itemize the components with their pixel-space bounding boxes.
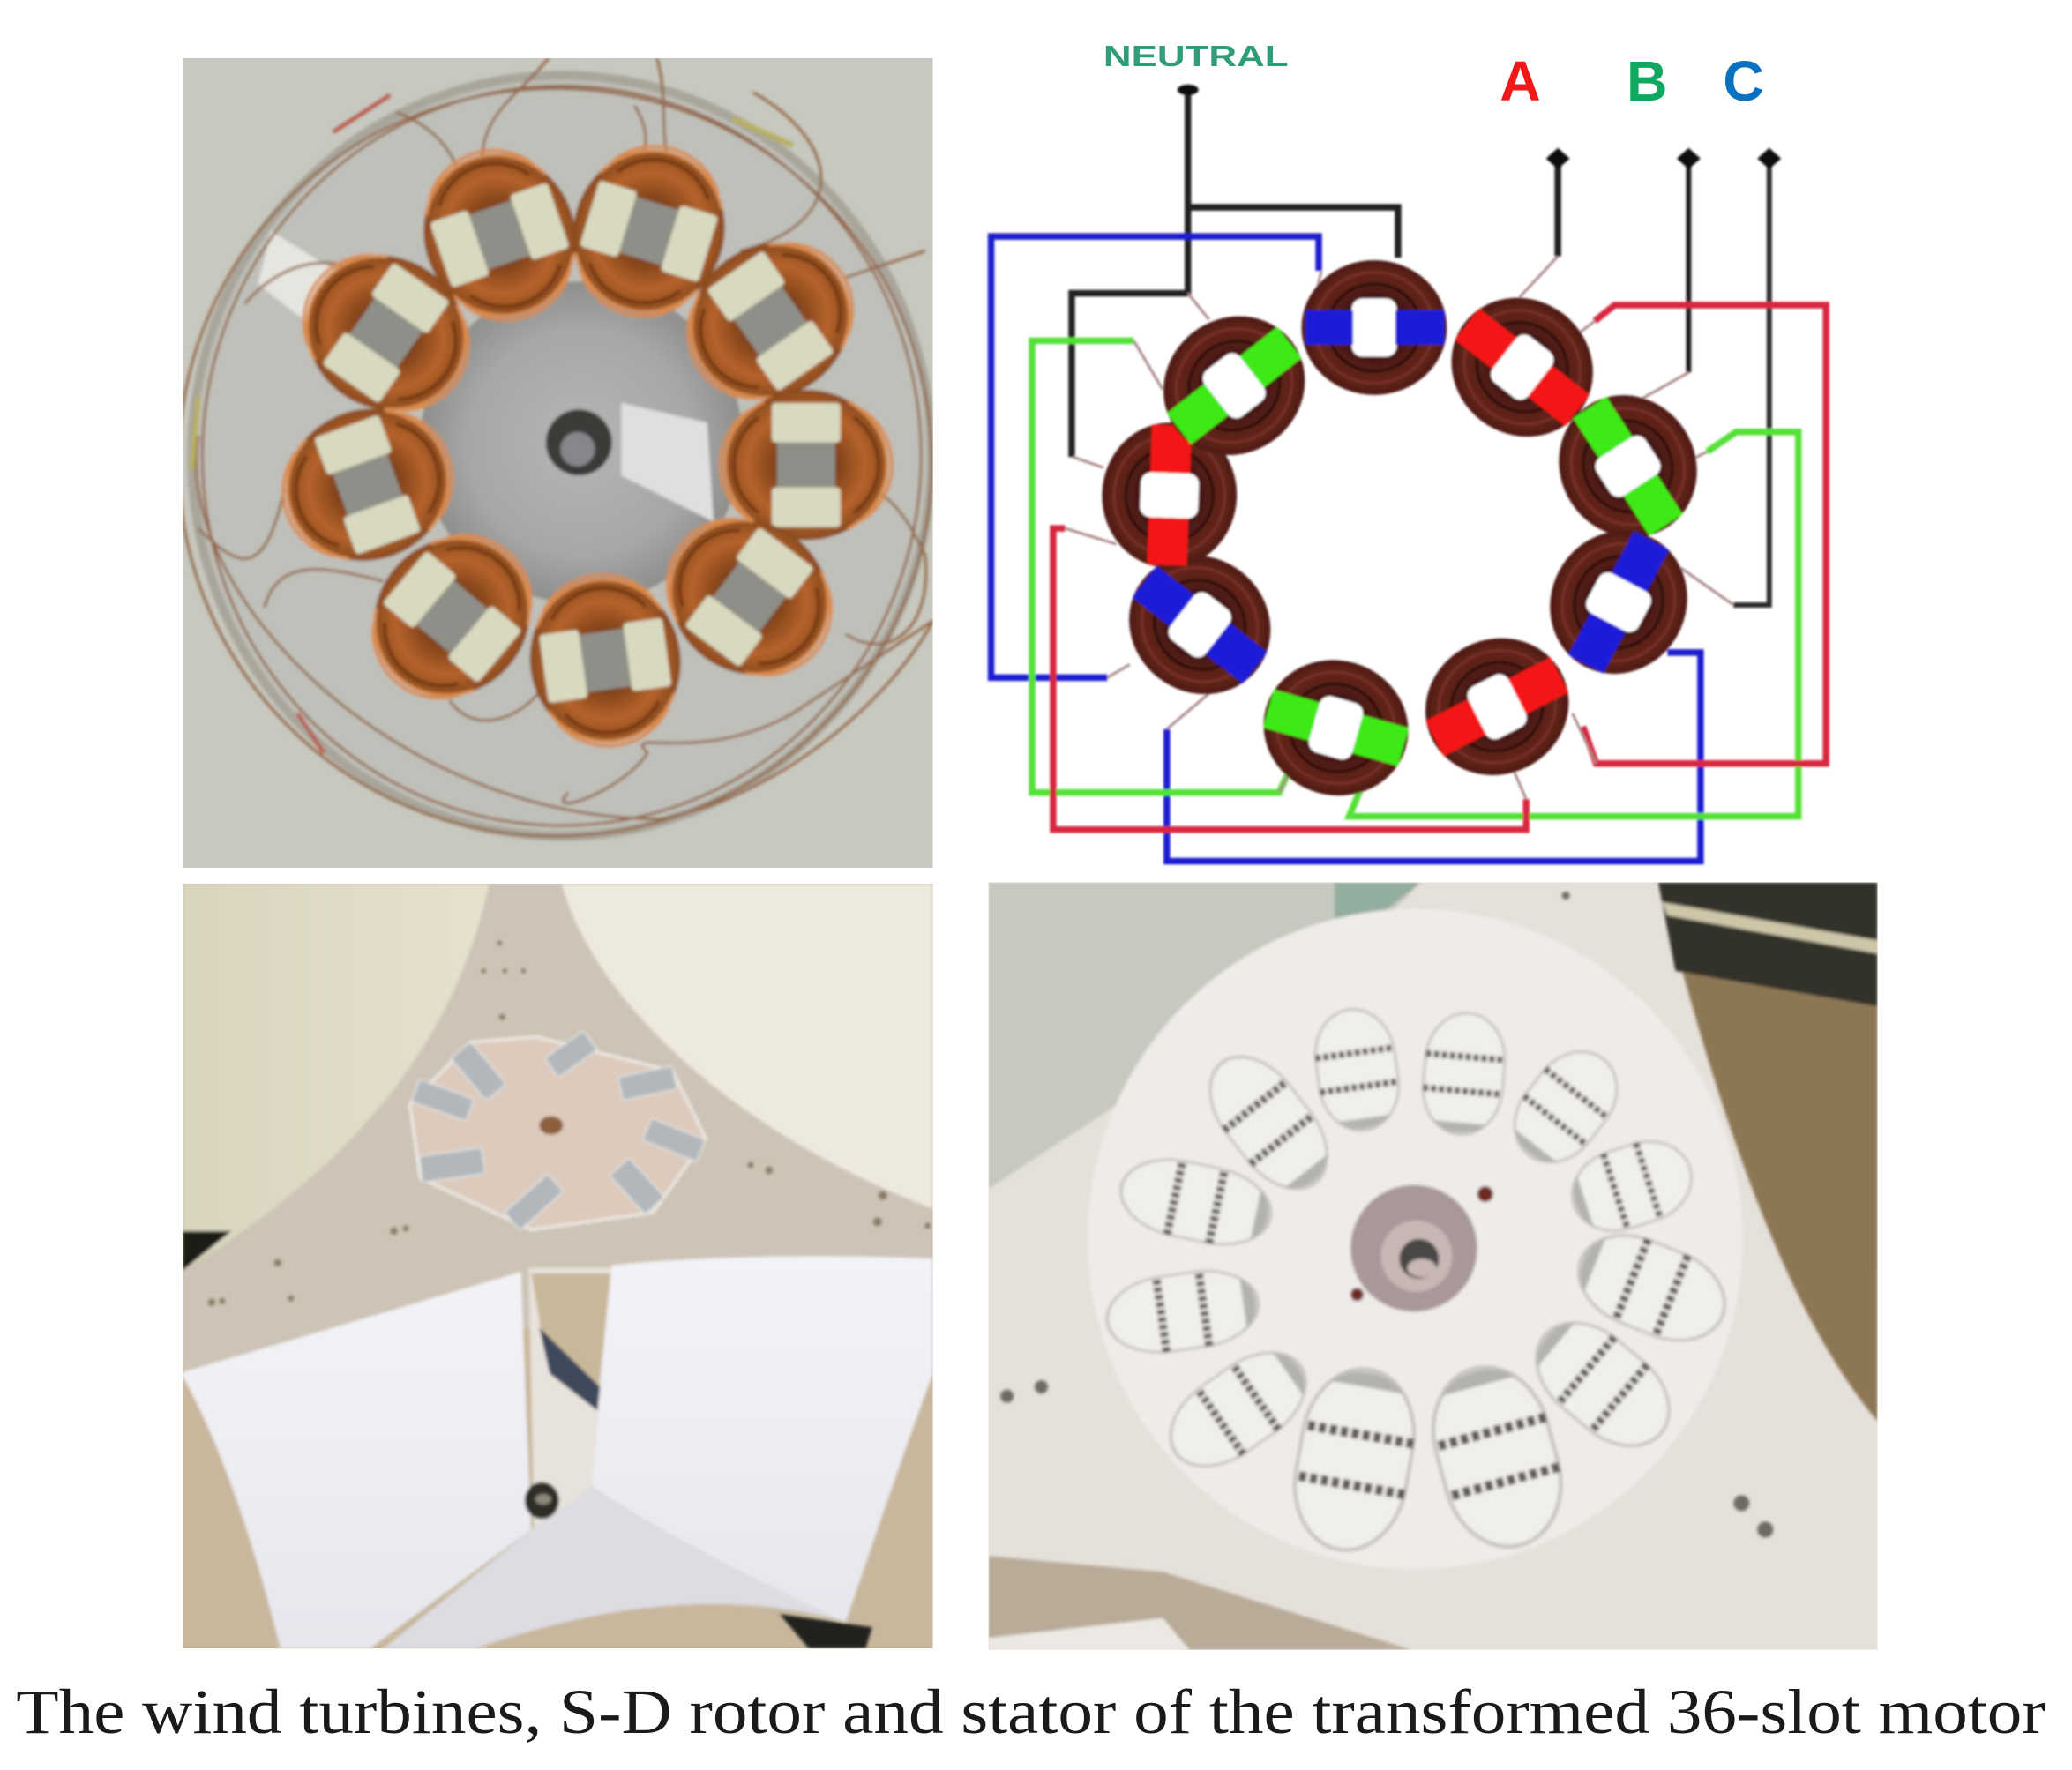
caption: The wind turbines, S-D rotor and stator of the transformed 36-slot motor xyxy=(16,1677,2046,1747)
label: phase A: A xyxy=(1500,49,1541,113)
eight magnets xyxy=(411,1031,706,1230)
neutral wires xyxy=(1072,93,1398,457)
label: phase C: C xyxy=(1723,49,1764,113)
left blade xyxy=(183,1272,531,1648)
panel: coil photograph (top left) xyxy=(178,58,933,868)
coil: red left xyxy=(1100,421,1239,571)
thin coil leads xyxy=(1065,257,1733,799)
label: NEUTRAL: NEUTRAL xyxy=(1103,40,1289,72)
top left background xyxy=(989,883,1420,1189)
wing nut xyxy=(525,1482,559,1519)
rotor disc xyxy=(410,1037,706,1229)
triangular plate xyxy=(183,884,933,1380)
red wires xyxy=(1053,305,1826,830)
bolt holes xyxy=(1350,1186,1493,1301)
plate holes xyxy=(1000,892,1773,1537)
phase A terminal wire xyxy=(1556,159,1560,257)
loose copper wires xyxy=(178,58,933,836)
coil: red A xyxy=(1424,269,1621,465)
coil: green right xyxy=(1532,369,1724,564)
dark strip behind blades xyxy=(539,1327,600,1411)
coil: blue top xyxy=(1302,260,1447,395)
centre hole xyxy=(546,409,612,475)
wall background xyxy=(183,884,933,1280)
top right background xyxy=(1658,883,1878,1422)
red wire marks xyxy=(297,95,390,753)
bottom left background xyxy=(989,1556,1411,1650)
coil: red bottom right xyxy=(1402,614,1592,800)
nine coils with ferrite blocks xyxy=(261,127,892,756)
terminal markers xyxy=(1178,85,1781,169)
glare on disc xyxy=(258,231,334,319)
light reflection on hub xyxy=(621,403,714,522)
bottom plate between blades xyxy=(384,1486,846,1648)
right blade xyxy=(592,1257,933,1622)
round stator disc xyxy=(1088,908,1743,1569)
phase B terminal wire xyxy=(1687,159,1690,372)
bottom dark gap xyxy=(780,1614,872,1648)
green wires xyxy=(1032,340,1799,817)
transparent disc with rim xyxy=(191,75,931,836)
panel: turbine with S-D rotor photograph (bottom left) xyxy=(183,884,933,1648)
panel: winding wiring diagram (top right) xyxy=(991,85,1826,862)
metal hub xyxy=(421,281,743,603)
coil: green bottom xyxy=(1247,643,1425,812)
twelve potted coils xyxy=(1103,1004,1739,1560)
rotor centre hole xyxy=(539,1117,563,1135)
panel: stator photograph (bottom right) xyxy=(989,883,1878,1650)
coil: blue right xyxy=(1525,506,1712,698)
phase C terminal wire xyxy=(1733,159,1769,605)
coil: green top left xyxy=(1135,288,1333,483)
yellow wire marks xyxy=(191,119,793,469)
centre bore xyxy=(1350,1184,1477,1311)
label: phase B: B xyxy=(1627,49,1668,113)
gap between blades xyxy=(528,1268,616,1532)
coil: blue bottom left xyxy=(1101,527,1298,722)
mounting holes xyxy=(207,940,931,1306)
black gap at left xyxy=(183,1231,231,1271)
blue wires xyxy=(991,236,1701,862)
